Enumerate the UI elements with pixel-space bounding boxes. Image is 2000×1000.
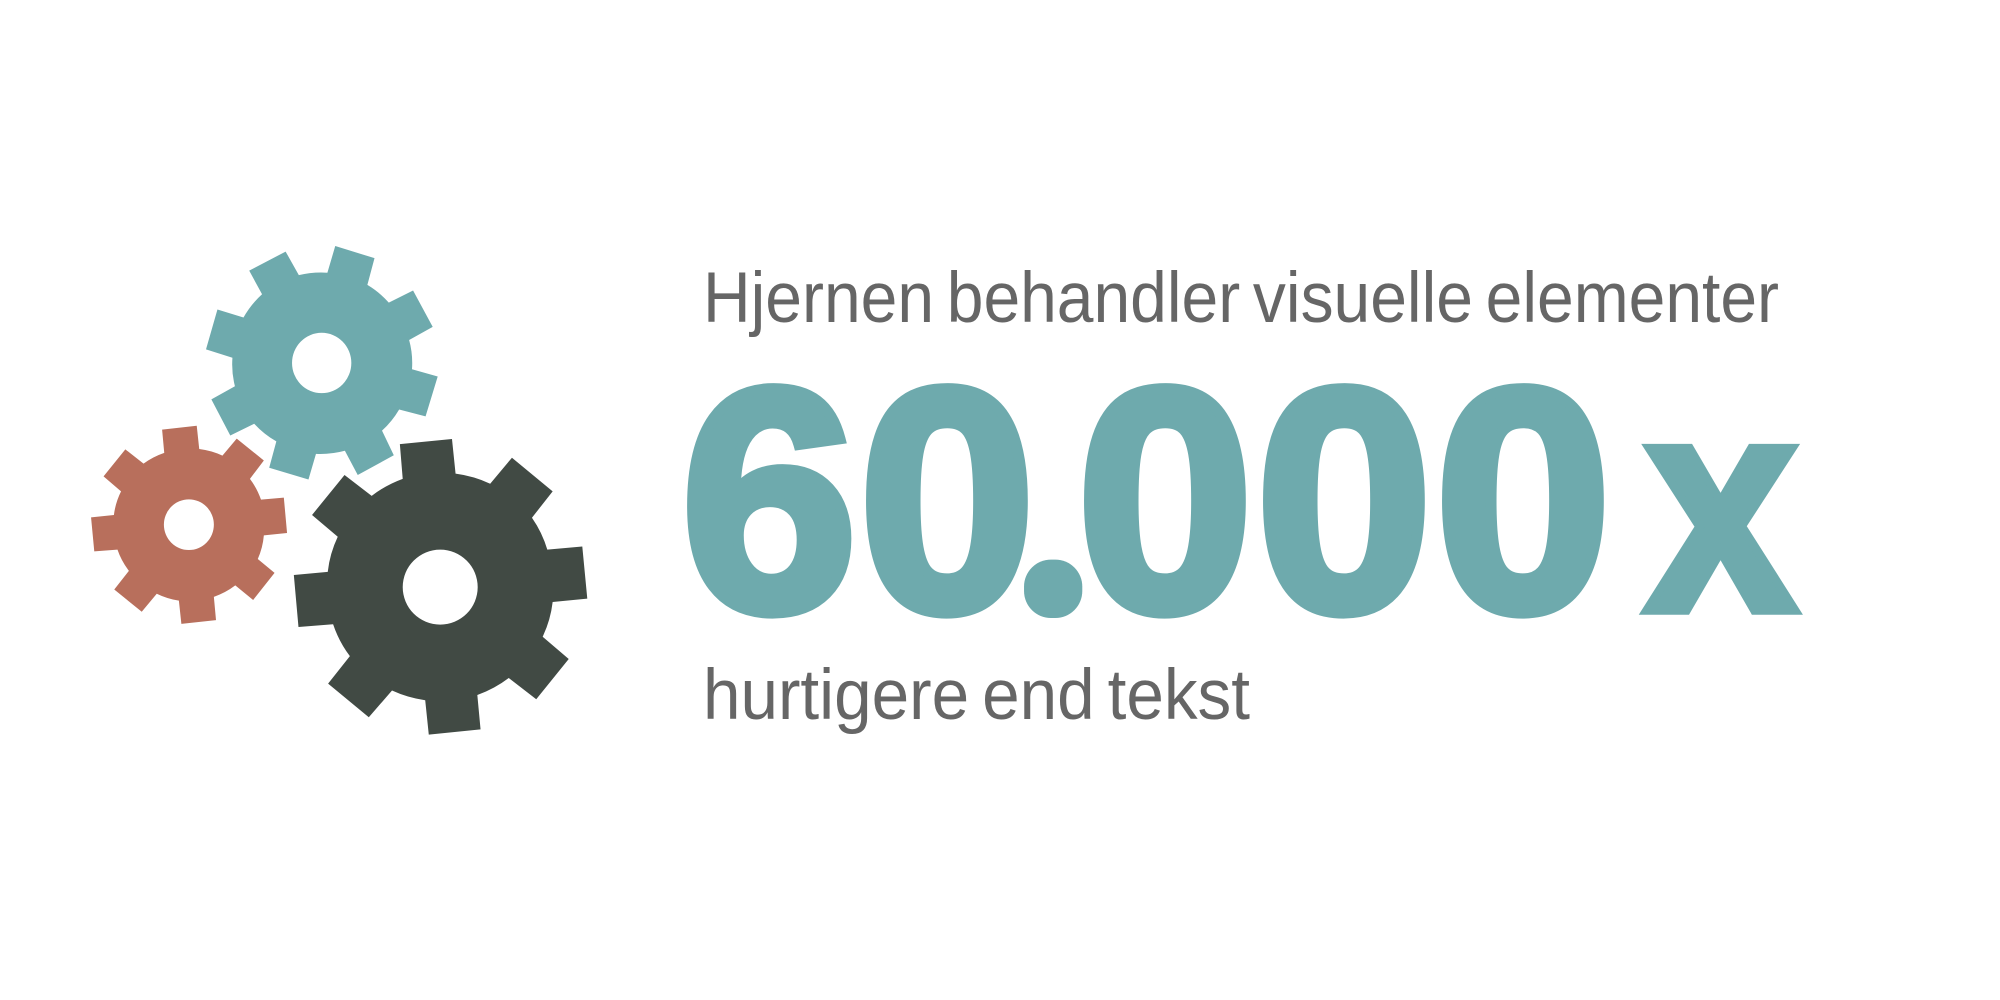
big number: x [1645, 335, 1799, 675]
big number: . [1049, 565, 1057, 598]
icon: rust gear [91, 426, 287, 624]
text: bottom line: hurtigere end tekst [703, 656, 1250, 735]
heading: top line: Hjernen behandler visuelle elementer [703, 259, 1779, 338]
big number: 0 [859, 324, 1035, 678]
big number: 0 [1435, 324, 1611, 678]
big number [681, 324, 1799, 678]
icon: gears [91, 246, 587, 735]
big number: 6 [681, 324, 857, 678]
icon: dark gear [294, 439, 587, 735]
big number: 0 [1256, 324, 1432, 678]
icon: teal gear [206, 246, 438, 480]
big number: 0 [1077, 324, 1253, 678]
